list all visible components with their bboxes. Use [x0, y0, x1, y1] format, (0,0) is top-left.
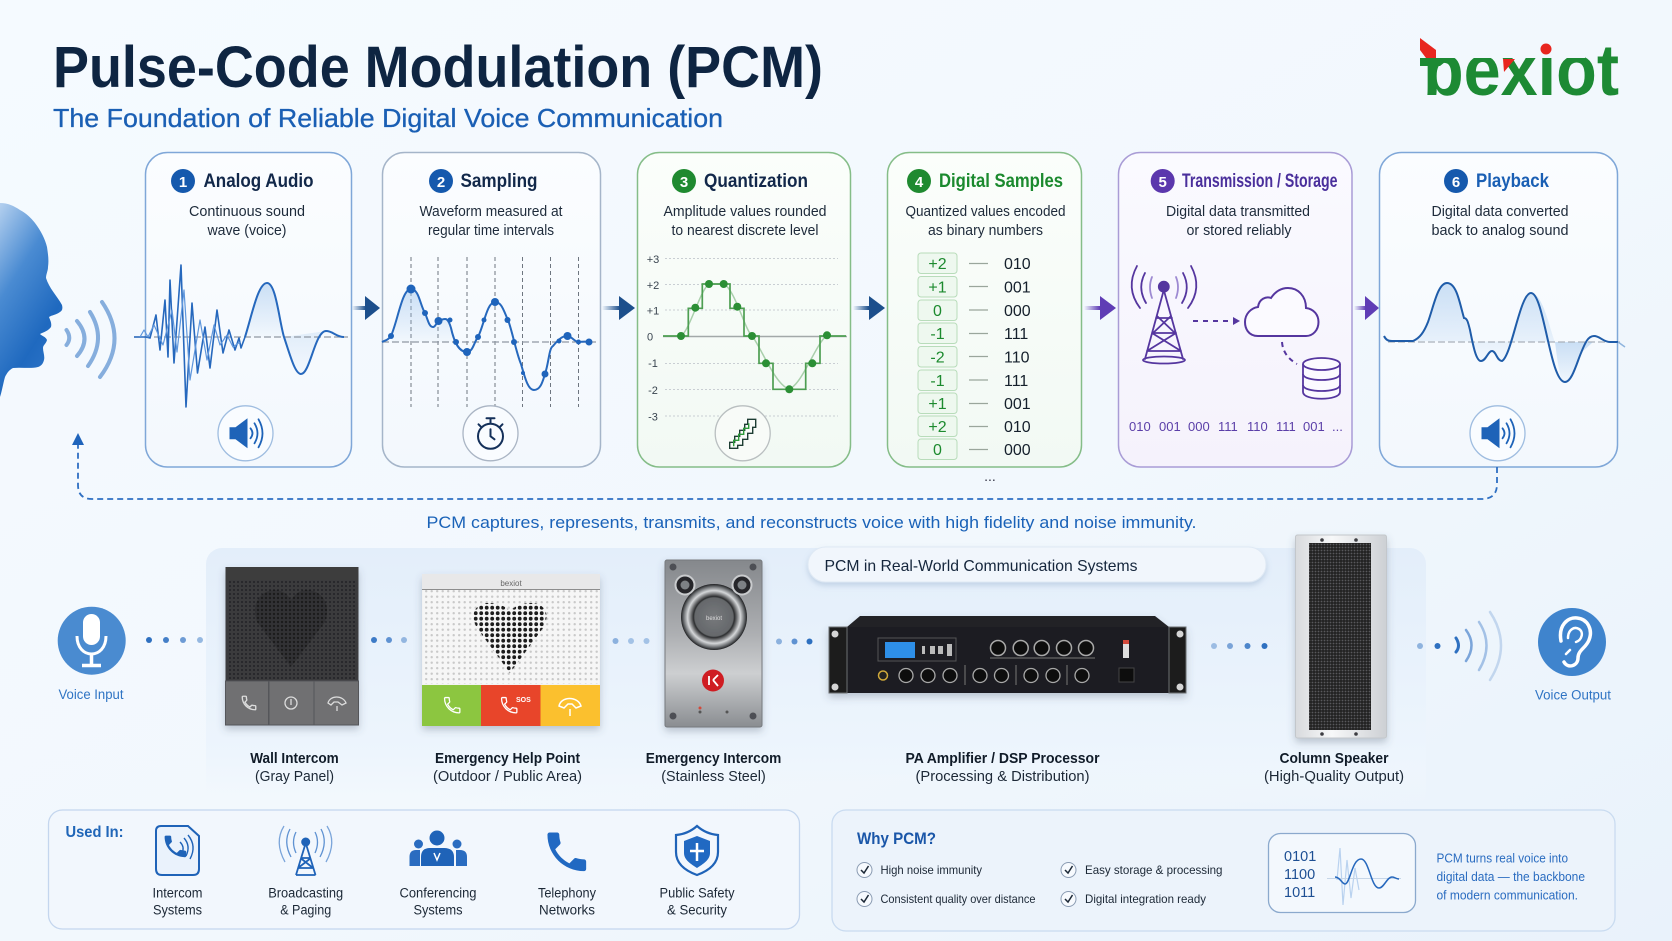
caption: column speaker [1264, 750, 1404, 785]
caption: emergency help point: (Outdoor / Public Area) [433, 768, 582, 785]
connector dots [371, 637, 407, 643]
badge 2: 2 [437, 174, 445, 191]
binary encoding table: 111 [1004, 326, 1028, 343]
panel: step 4 digital samples [888, 152, 1082, 484]
caption: emergency intercom: Emergency Intercom [646, 750, 781, 767]
item: telephony networks [538, 832, 596, 918]
heading: Quantization [704, 171, 808, 192]
badge 6 [1444, 169, 1468, 193]
binary encoding table: -2 [930, 350, 945, 366]
title: Pulse-Code Modulation (PCM) [53, 35, 823, 100]
badge 1: 1 [179, 174, 187, 191]
binary stream: 001 [1303, 419, 1325, 434]
item: conferencing systems [400, 830, 476, 918]
heading: Transmission / Storage [1182, 171, 1338, 192]
caption: PCM captures, represents, transmits, and reconstructs voice with high fidelity and noise immunity. [426, 513, 1196, 532]
binary stream: 010 [1129, 419, 1151, 434]
binary encoding table: 000 [1004, 442, 1031, 459]
device: emergency intercom [665, 560, 762, 727]
badge 1 [171, 169, 195, 193]
description [1166, 203, 1310, 239]
description: Waveform measured at [420, 203, 563, 220]
item: public safety and security [660, 826, 735, 918]
description [189, 203, 305, 239]
speaker head silhouette [0, 203, 62, 397]
arrow 4 to 5 [1084, 296, 1116, 320]
description [1432, 203, 1568, 239]
icon: stopwatch [463, 406, 518, 461]
binary encoding table: 001 [1004, 396, 1031, 413]
arrow: tower to cloud [1193, 317, 1240, 325]
description: wave (voice) [207, 222, 286, 239]
heading: Analog Audio [204, 171, 314, 192]
binary stream: 111 [1218, 419, 1238, 434]
logo: bexiot [1420, 38, 1618, 96]
caption: wall intercom [250, 750, 339, 785]
caption: emergency intercom: (Stainless Steel) [661, 768, 766, 785]
quantization staircase chart [647, 254, 847, 424]
summary text: PCM turns real voice into [1436, 852, 1568, 866]
benefit checklist: High noise immunity [880, 863, 982, 877]
icon: cloud [1245, 288, 1318, 336]
binary encoding table: 111 [1004, 373, 1028, 390]
benefit checklist [857, 862, 1222, 906]
heading: Why PCM? [857, 830, 936, 848]
badge 3: 3 [680, 174, 688, 191]
badge 2 [429, 169, 453, 193]
binary stream: 111 [1276, 419, 1296, 434]
item: conferencing systems: Conferencing [400, 886, 476, 900]
sampled waveform [382, 257, 596, 407]
icon: voice input microphone [58, 607, 126, 675]
quantization staircase chart: -2 [648, 385, 658, 397]
description: back to analog sound [1432, 222, 1568, 239]
description: regular time intervals [428, 222, 554, 239]
description: as binary numbers [928, 222, 1043, 239]
heading: Playback [1476, 171, 1549, 192]
sound waves to ear [1417, 612, 1501, 680]
caption: PA amplifier: PA Amplifier / DSP Processor [906, 750, 1100, 767]
description: or stored reliably [1186, 222, 1292, 239]
quantization staircase chart: +1 [647, 306, 659, 318]
description: Continuous sound [189, 203, 305, 220]
caption: column speaker: (High-Quality Output) [1264, 768, 1404, 785]
quantization staircase chart: -1 [648, 358, 658, 370]
item: broadcasting and paging: Broadcasting [268, 886, 343, 900]
panel: step 1 analog audio [134, 152, 352, 467]
device: emergency help point [422, 574, 600, 726]
analog waveform [134, 265, 348, 407]
arrow: feedback loop [72, 433, 1497, 499]
item: intercom systems: Intercom [152, 886, 202, 900]
binary encoding table: -1 [930, 373, 945, 390]
binary encoding table: +1 [928, 280, 947, 296]
panel: step 6 playback [1380, 152, 1625, 467]
section heading pill [808, 547, 1266, 582]
sound waves from mouth [66, 302, 115, 377]
description: to nearest discrete level [672, 222, 818, 239]
panel: used in [48, 810, 800, 929]
subtitle: The Foundation of Reliable Digital Voice Communication [53, 103, 723, 133]
arrow 3 to 4 [853, 296, 885, 320]
benefit checklist: Consistent quality over distance [880, 892, 1036, 906]
benefit checklist: Easy storage & processing [1085, 863, 1222, 877]
caption: column speaker: Column Speaker [1280, 750, 1389, 767]
description [906, 203, 1066, 239]
benefit checklist: Digital integration ready [1085, 892, 1206, 906]
caption: wall intercom: (Gray Panel) [255, 768, 334, 785]
connector dots [776, 638, 812, 644]
icon: radio tower [1132, 266, 1196, 364]
badge 5: 5 [1159, 174, 1167, 191]
heading: Digital Samples [939, 171, 1063, 192]
continuation dots: ... [984, 468, 996, 484]
arrow 1 to 2 [352, 296, 380, 320]
caption: emergency help point [433, 750, 582, 785]
icon: voice output ear [1538, 608, 1606, 676]
connector dots [146, 637, 203, 643]
device: wall intercom [226, 567, 358, 725]
item: conferencing systems: Systems [414, 902, 463, 918]
item: broadcasting and paging [268, 826, 343, 918]
description: Digital data transmitted [1166, 203, 1310, 220]
description: Quantized values encoded [906, 203, 1066, 220]
connector dots [1211, 643, 1268, 649]
caption: emergency help point: Emergency Help Point [435, 750, 580, 767]
device: PA amplifier [829, 616, 1186, 693]
item: telephony networks: Networks [539, 902, 595, 918]
binary encoding table: +2 [928, 256, 947, 273]
connector dots [612, 638, 650, 644]
panel: step 3 quantization [638, 152, 850, 467]
binary to wave card: 1100 [1284, 867, 1315, 883]
binary to wave card [1268, 834, 1416, 912]
badge 4: 4 [915, 174, 924, 191]
item: public safety and security: Public Safety [660, 886, 735, 900]
binary encoding table: -1 [930, 326, 945, 343]
description: Amplitude values rounded [664, 203, 826, 220]
binary encoding table: 110 [1004, 350, 1030, 366]
heading: Sampling [460, 171, 538, 192]
heading: Used In: [66, 824, 124, 841]
binary stream: ... [1332, 419, 1343, 434]
item: intercom systems: Systems [153, 902, 202, 918]
binary encoding table [918, 253, 1031, 460]
description: Digital data converted [1432, 203, 1568, 220]
badge 5 [1151, 169, 1175, 193]
icon: speaker [218, 406, 273, 461]
summary text [1436, 852, 1585, 902]
arrow 2 to 3 [602, 296, 635, 320]
section heading pill: PCM in Real-World Communication Systems [824, 558, 1138, 575]
item: public safety and security: & Security [667, 902, 727, 918]
panel: step 2 sampling [382, 152, 600, 467]
summary text: digital data — the backbone [1436, 870, 1585, 884]
item: intercom systems [152, 826, 202, 918]
quantization staircase chart: +2 [647, 280, 659, 292]
device brand: bexiot [500, 579, 522, 588]
icon: staircase [715, 406, 770, 461]
caption: wall intercom: Wall Intercom [250, 750, 339, 767]
binary encoding table: +2 [928, 419, 947, 436]
summary text: of modern communication. [1436, 888, 1578, 902]
binary encoding table: 0 [933, 442, 942, 459]
binary encoding table: 010 [1004, 419, 1031, 436]
device: column speaker [1296, 535, 1386, 738]
icon: database [1303, 358, 1340, 399]
caption: emergency intercom [646, 750, 781, 785]
binary to wave card: 0101 [1284, 849, 1316, 865]
quantization staircase chart: 0 [647, 332, 653, 344]
quantization staircase chart: +3 [647, 254, 659, 266]
binary encoding table: 0 [933, 303, 942, 320]
item: broadcasting and paging: & Paging [280, 902, 331, 918]
label: voice output: Voice Output [1535, 688, 1611, 702]
badge 6: 6 [1452, 174, 1460, 191]
badge 4 [907, 169, 931, 193]
panel: real-world systems band [206, 548, 1426, 808]
binary encoding table: 010 [1004, 256, 1031, 273]
binary stream: 001 [1159, 419, 1181, 434]
binary to wave card: 1011 [1284, 885, 1315, 901]
item: telephony networks: Telephony [538, 886, 596, 900]
badge 3 [672, 169, 696, 193]
panel: why PCM [832, 810, 1615, 931]
caption: PA amplifier [906, 750, 1100, 785]
binary stream: 000 [1188, 419, 1210, 434]
panel: step 5 transmission / storage [1118, 152, 1352, 467]
arrow 5 to 6 [1354, 296, 1379, 320]
logo: bexiot: bexiot [1423, 31, 1619, 111]
binary encoding table: +1 [928, 396, 947, 413]
quantization staircase chart: -3 [648, 412, 658, 424]
icon: speaker [1470, 406, 1525, 461]
binary encoding table: 000 [1004, 303, 1031, 320]
reconstructed waveform [1384, 283, 1625, 382]
binary stream: 110 [1247, 419, 1268, 434]
device: emergency intercom: bexiot [706, 616, 722, 622]
caption: PA amplifier: (Processing & Distribution) [916, 768, 1090, 785]
device: emergency help point: SOS [516, 697, 531, 704]
binary encoding table: 001 [1004, 280, 1031, 296]
description [664, 203, 826, 239]
label: voice input: Voice Input [58, 687, 124, 702]
description [420, 203, 563, 239]
arrow: cloud to database [1282, 342, 1297, 364]
